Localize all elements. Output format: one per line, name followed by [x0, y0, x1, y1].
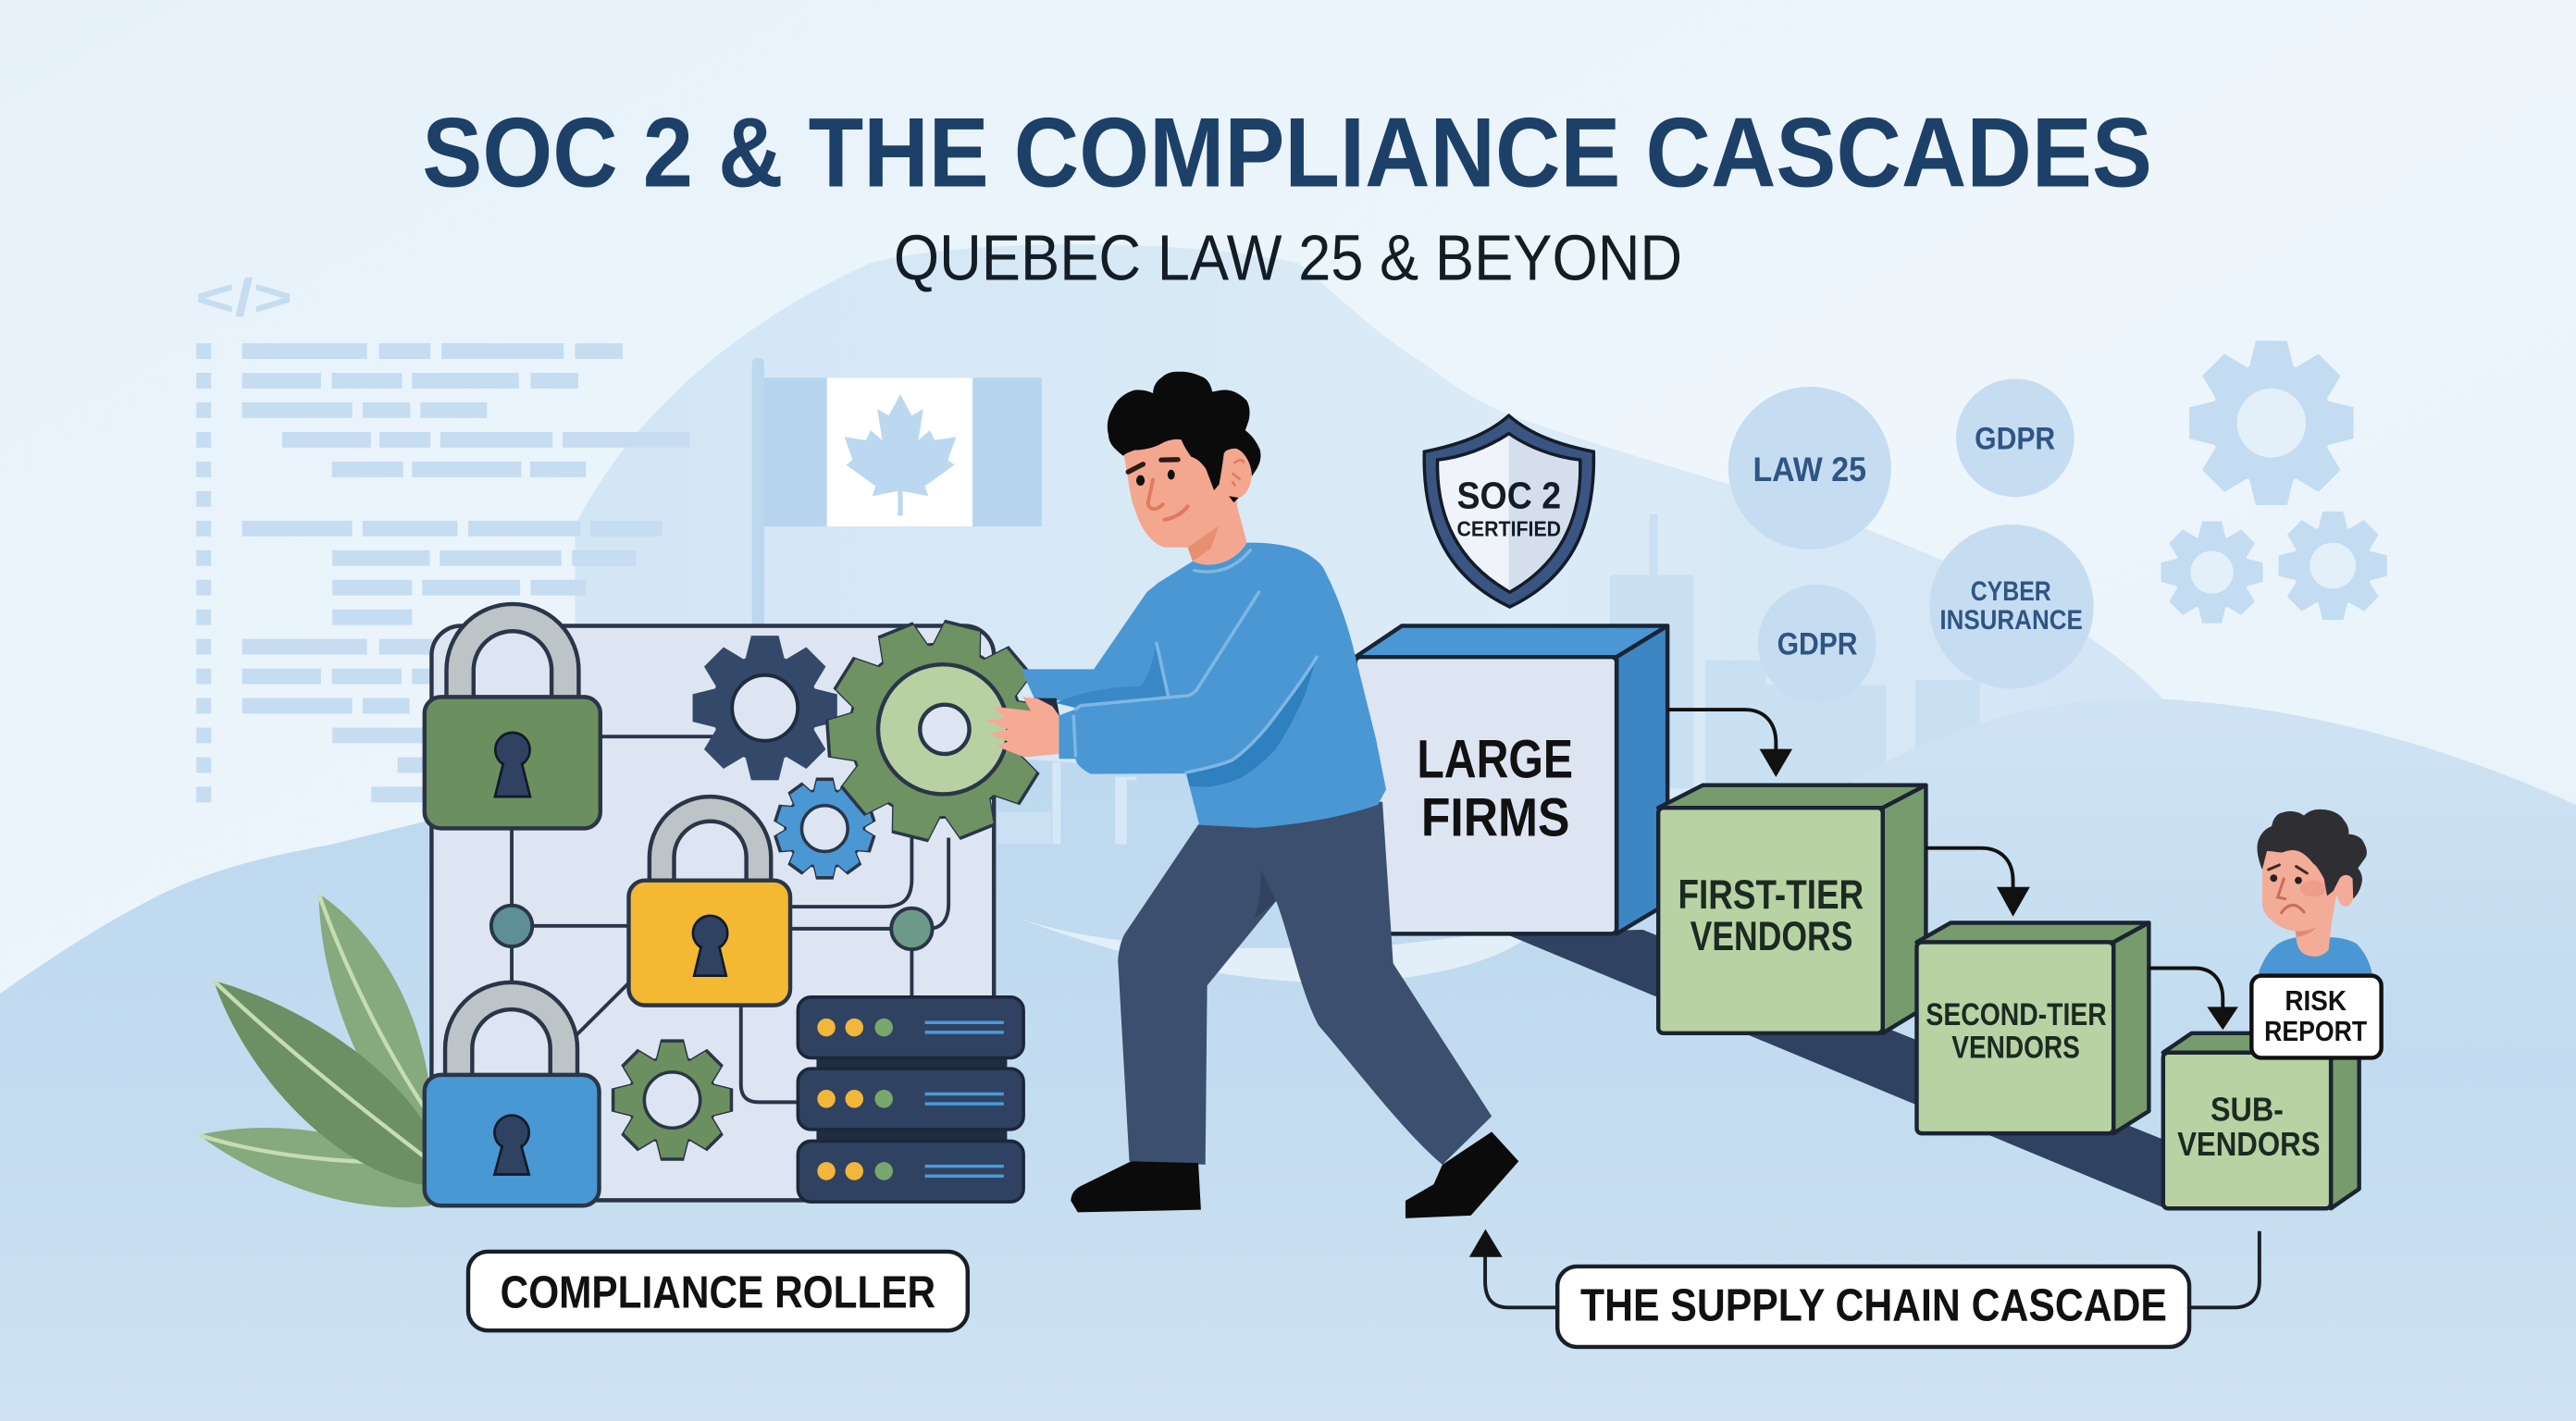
- label: the supply chain cascade: THE SUPPLY CHAIN CASCADE: [1580, 1281, 2167, 1331]
- arrow: large firms to first tier: [1667, 710, 1792, 777]
- box: large firms: FIRMS: [1421, 788, 1570, 848]
- node: left: [491, 906, 532, 946]
- back cuff: [1032, 698, 1061, 726]
- box: first-tier vendors: [1658, 785, 1926, 1033]
- box: sub-vendors: SUB-: [2211, 1090, 2284, 1128]
- code icon: </>: [195, 269, 292, 327]
- bubble: GDPR bottom: [1758, 585, 1876, 703]
- ramp under vendor boxes: [1504, 930, 2169, 1210]
- shield: SOC 2 certified: CERTIFIED: [1457, 516, 1561, 540]
- box: second-tier vendors: SECOND-TIER: [1926, 997, 2107, 1032]
- sweater: [1059, 543, 1386, 828]
- label: risk report: [2251, 976, 2382, 1057]
- sleeve seams: [1073, 550, 1317, 772]
- background skyline: [1610, 514, 1979, 792]
- yellow padlock: [628, 809, 790, 1006]
- box: first-tier vendors: FIRST-TIER: [1678, 872, 1864, 918]
- background foreground hills: [0, 698, 2576, 1421]
- background code lines: [196, 343, 689, 802]
- large green gear: [800, 597, 1072, 865]
- face: [1123, 436, 1237, 548]
- box: first-tier vendors: VENDORS: [1690, 914, 1852, 959]
- label: the supply chain cascade: [1557, 1267, 2189, 1347]
- node: right: [891, 908, 933, 949]
- arrow: cascade loop right: [2189, 1231, 2260, 1307]
- bubble: GDPR top: GDPR: [1975, 422, 2055, 457]
- shield: SOC 2 certified: SOC 2: [1457, 474, 1561, 516]
- eyes and frown: [2269, 865, 2307, 913]
- label: compliance roller: [468, 1252, 968, 1330]
- arrow: second tier to sub-vendors: [2149, 968, 2238, 1030]
- worried small person: [2257, 809, 2373, 979]
- label: compliance roller: COMPLIANCE ROLLER: [501, 1267, 935, 1317]
- leaves: [199, 894, 432, 1207]
- jaw shadow: [2295, 927, 2316, 937]
- bubble: GDPR top: [1956, 378, 2074, 497]
- background building fragments: [997, 762, 1136, 845]
- back sleeve shadow: [1056, 643, 1168, 708]
- Canadian flag: [752, 358, 1042, 629]
- hair: [2257, 809, 2367, 899]
- bubble: Law 25: LAW 25: [1752, 450, 1866, 488]
- ear: [1219, 448, 1252, 499]
- title: SOC 2 & THE COMPLIANCE CASCADES: [422, 98, 2152, 208]
- sleeve fold: [1186, 657, 1317, 786]
- regulation bubbles: [1728, 378, 2094, 703]
- label: risk report: RISK: [2285, 986, 2347, 1017]
- box: second-tier vendors: [1916, 922, 2149, 1133]
- arrow: first tier to second tier: [1926, 848, 2030, 917]
- bubble: Cyber insurance: [1929, 525, 2094, 688]
- eyes and expression: [1128, 460, 1188, 520]
- main person pushing: [985, 372, 1518, 1218]
- background gears: [2161, 340, 2387, 624]
- hair behind ear: [1229, 496, 1239, 502]
- shirt: [2259, 937, 2373, 979]
- bubble: Law 25: [1728, 387, 1891, 550]
- server unit 2: [798, 1069, 1023, 1130]
- shield: SOC 2 certified: [1424, 415, 1593, 607]
- hair: [1108, 372, 1261, 490]
- pants crease: [1254, 869, 1276, 920]
- blue padlock: [425, 995, 600, 1205]
- box: large firms: LARGE: [1417, 730, 1573, 790]
- hand: [985, 697, 1059, 758]
- server unit 1: [798, 997, 1023, 1057]
- server stack: [798, 997, 1023, 1202]
- server unit 3: [798, 1141, 1023, 1202]
- small blue gear: [773, 778, 877, 880]
- cheek blush: [2300, 881, 2326, 896]
- bubble: GDPR bottom: GDPR: [1777, 627, 1858, 662]
- back arm: [1021, 562, 1199, 706]
- bubble: Cyber insurance: CYBER: [1971, 576, 2051, 607]
- neck and face: [2262, 847, 2339, 957]
- jaw shadow: [1188, 525, 1219, 562]
- green padlock: [425, 618, 601, 828]
- connector lines: [512, 736, 948, 1102]
- box: large firms: [1356, 625, 1667, 933]
- box: second-tier vendors: VENDORS: [1951, 1030, 2080, 1065]
- box: sub-vendors: [2163, 1033, 2359, 1208]
- subtitle: QUEBEC LAW 25 & BEYOND: [894, 222, 1682, 294]
- bubble: Cyber insurance: INSURANCE: [1939, 605, 2083, 636]
- arrow: cascade loop left: [1469, 1229, 1557, 1307]
- pants: [1118, 801, 1492, 1165]
- navy gear: [693, 636, 837, 780]
- right shoe: [1406, 1131, 1518, 1218]
- left shoe: [1071, 1161, 1201, 1212]
- small green gear: [612, 1039, 733, 1161]
- ear: [2336, 872, 2355, 907]
- box: sub-vendors: VENDORS: [2177, 1125, 2321, 1163]
- circuit board: [431, 625, 994, 1200]
- panel: compliance roller: [199, 597, 1072, 1207]
- ear detail: [1232, 460, 1244, 487]
- neck: [1188, 506, 1247, 564]
- label: risk report: REPORT: [2264, 1017, 2368, 1047]
